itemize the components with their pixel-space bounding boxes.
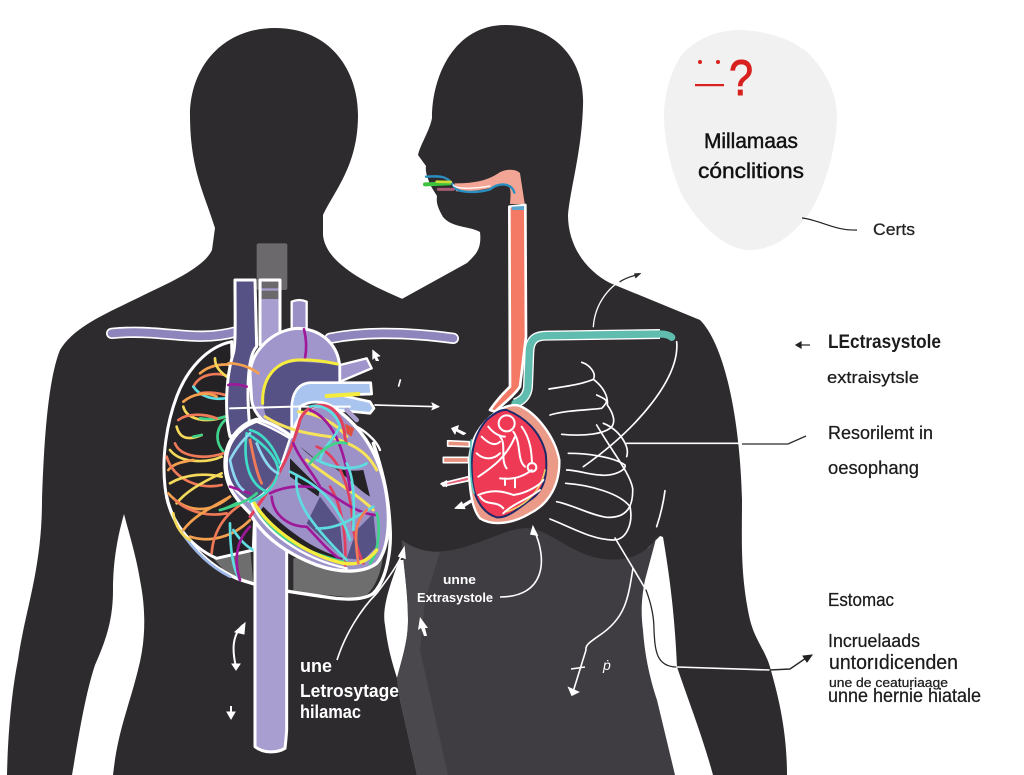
inner arch dark xyxy=(263,362,338,433)
oesophagus label: Resorilemt in xyxy=(828,423,933,443)
arrow at the shoulder xyxy=(593,273,641,327)
bubble leader line xyxy=(802,218,857,230)
bubble title: Millamaas xyxy=(704,130,798,153)
bubble title xyxy=(698,130,804,183)
stomach label: Estomac xyxy=(828,590,894,610)
stomach and esophagus diagram xyxy=(425,170,742,540)
extrasystole label: LEctrasystole xyxy=(828,332,941,353)
esophagus tube xyxy=(490,205,526,412)
lower left arrow from label to heart xyxy=(337,548,405,660)
left carotid branch xyxy=(292,300,307,330)
superior vena cava xyxy=(227,280,257,437)
abdomen branching nerve xyxy=(569,568,633,695)
right atrium dark xyxy=(227,422,290,502)
red question mark symbol: ? xyxy=(729,50,753,106)
stomach white folds xyxy=(477,415,543,513)
heart and lung diagram xyxy=(112,243,453,752)
stomach label xyxy=(828,590,981,707)
oesophagus label: oesophang xyxy=(828,458,919,478)
ventricle dark gaps xyxy=(258,447,370,560)
teal tube xyxy=(515,334,660,403)
red question mark symbol xyxy=(695,50,753,106)
pulmonary rib curves xyxy=(167,358,257,580)
subclavian vessels xyxy=(112,332,453,338)
esophagus blue band xyxy=(511,206,524,210)
stomach side arrows xyxy=(441,426,473,509)
right body silhouette xyxy=(400,25,787,775)
left body labels xyxy=(300,656,399,722)
abdomen label: unne xyxy=(443,572,476,587)
left body labels: hilamac xyxy=(300,702,361,722)
small down arrow xyxy=(227,706,235,719)
hiatal vessel stubs xyxy=(442,441,469,486)
pulmonary yellow band xyxy=(327,394,358,396)
vessels outline lines xyxy=(220,329,380,568)
pulmonary artery light blue xyxy=(292,383,374,433)
resorption leader line xyxy=(742,436,806,444)
stomach label: une de ceaturiaage xyxy=(829,675,948,690)
abdomen grey torso xyxy=(397,528,675,775)
right atrium valve lines xyxy=(230,430,280,502)
small left arrow xyxy=(796,342,810,348)
abdomen curved pointer xyxy=(500,527,541,597)
main heart body xyxy=(225,405,388,571)
lung outer contour xyxy=(167,443,390,599)
stomach red lining xyxy=(472,410,546,517)
small tick mark xyxy=(399,380,400,386)
left body labels: une xyxy=(300,656,332,676)
left body silhouette xyxy=(7,28,425,775)
arch branch up-right xyxy=(340,358,372,382)
stomach label: untorıdicenden xyxy=(829,652,958,674)
pulmonary vein red tag xyxy=(345,423,354,437)
nerve lines xyxy=(549,342,742,540)
extrasystole label: extraisytsle xyxy=(827,368,919,387)
bubble caption: Certs xyxy=(873,220,915,239)
abdomen small letter: ṗ xyxy=(602,657,611,673)
grey lower lobes xyxy=(213,547,383,598)
stomach yellow inner edge xyxy=(507,470,545,512)
abdomen label: Extrasystole xyxy=(417,590,493,605)
arrow to the esophagus xyxy=(375,403,439,410)
left body labels: Letrosytage xyxy=(300,681,399,701)
aortic arch xyxy=(250,328,340,437)
abdomen small up arrow xyxy=(418,617,428,636)
oesophagus label xyxy=(828,423,933,478)
trachea with gray bands xyxy=(260,280,280,345)
stomach inner teal edge xyxy=(470,440,474,493)
abdomen label xyxy=(417,572,493,605)
stomach label: unne hernie hiatale xyxy=(828,686,981,707)
colored airway tubes xyxy=(425,170,524,203)
stomach to right leader line xyxy=(615,538,812,670)
abdomen lighter strip xyxy=(397,540,448,775)
double-headed curved arrow xyxy=(232,623,245,670)
ventricle dark shade xyxy=(307,497,377,560)
extrasystole label xyxy=(827,332,941,387)
stomach label: Incruelaads xyxy=(828,631,920,651)
small pointer arrow xyxy=(373,350,380,361)
small upper vessel xyxy=(347,410,357,420)
thought bubble xyxy=(664,30,837,250)
grey collar block xyxy=(257,243,287,290)
descending aorta xyxy=(255,497,287,752)
stomach outer wall xyxy=(469,405,559,523)
bubble title: cónclitions xyxy=(698,160,804,183)
lung outline xyxy=(164,342,257,558)
